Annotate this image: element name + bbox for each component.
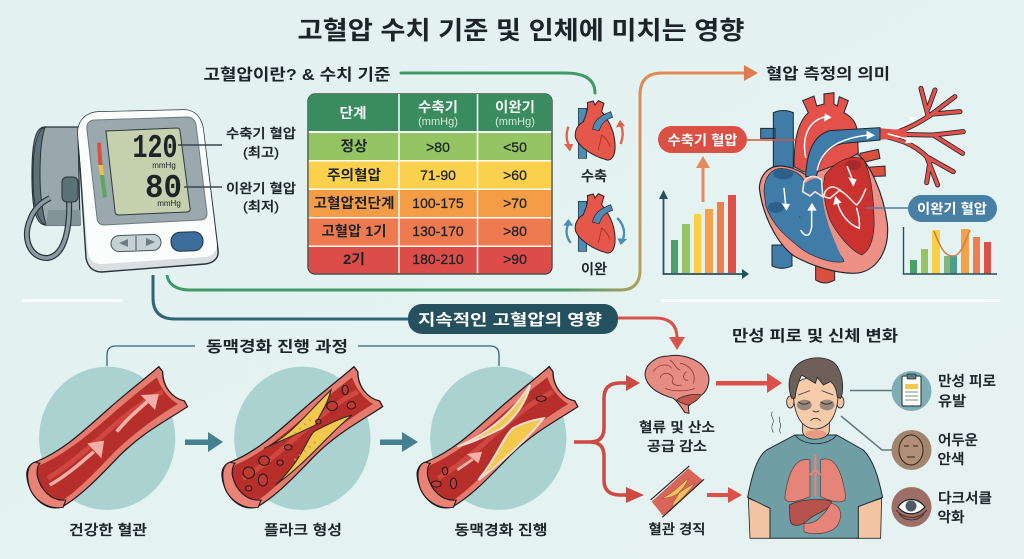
table rows: 고혈압전단계: [314, 195, 394, 211]
table rows: >80: [426, 139, 450, 155]
label: contraction: 수축: [581, 168, 607, 184]
table rows: 주의혈압: [327, 167, 381, 183]
icon: brain: [645, 355, 709, 413]
label: systolic: [226, 126, 296, 160]
lungs: [785, 459, 846, 502]
hair: [789, 358, 843, 398]
heart diagram: [759, 88, 963, 283]
table rows: [314, 138, 527, 267]
monitor body: [78, 110, 218, 272]
table rows: 고혈압 1기: [322, 223, 386, 239]
chart: systolic bars: [659, 190, 749, 279]
unit: mmHg: [157, 199, 181, 208]
fatigue lines: [771, 412, 781, 433]
table rows: 정상: [340, 138, 368, 154]
table rows: 71-90: [420, 167, 456, 183]
cuff: [32, 127, 80, 225]
symptom: worsened dark circles: 악화: [938, 509, 965, 525]
table rows: >60: [503, 167, 527, 183]
flow arrows: [784, 117, 912, 235]
symptom: dark complexion: 안색: [938, 451, 964, 467]
callout: systolic pressure: 수축기 혈압: [668, 132, 738, 148]
heading: arteriosclerosis process: 동맥경화 진행 과정: [206, 338, 348, 356]
arterial tree: [879, 88, 963, 185]
screen bezel: [87, 117, 207, 225]
label: progression: 동맥경화 진행: [454, 522, 548, 538]
aorta: [794, 93, 858, 173]
connector: monitor to meaning of measurement: [167, 65, 758, 290]
icon: eye: [892, 487, 932, 527]
label: diastolic: [226, 181, 296, 214]
table rows: 100-175: [412, 195, 464, 211]
connector: heading to heart cycle: [401, 73, 595, 93]
title: 고혈압 수치 기준 및 인체에 미치는 영향: [298, 17, 744, 45]
label: reduced blood flow: 공급 감소: [647, 439, 707, 454]
stage: healthy vessel: [27, 367, 188, 510]
label: reduced blood flow: 혈류 및 산소: [639, 419, 715, 435]
table header: 수축기: [418, 99, 458, 115]
heading: chronic fatigue and body changes: 만성 피로 및 신체 변화: [732, 327, 898, 345]
table rows: >80: [503, 223, 527, 239]
torso: [748, 435, 883, 538]
table: blood pressure stages: [308, 94, 552, 274]
icon: dark face: [892, 430, 932, 470]
table header: 단계: [340, 105, 366, 121]
table rows: 130-170: [412, 223, 464, 239]
table rows: <50: [503, 139, 527, 155]
table rows: >70: [503, 195, 527, 211]
branching arrows: [574, 375, 644, 503]
label: vessel stiffness: 혈관 경직: [648, 521, 706, 537]
label: systolic: (최고): [243, 145, 279, 160]
bracket: [107, 346, 499, 366]
chart: diastolic bars: [904, 227, 997, 274]
table header: [340, 99, 535, 128]
icon: heart contraction: [564, 101, 625, 160]
face: [793, 377, 838, 429]
badge: sustained hypertension effects: 지속적인 고혈압의 영향: [418, 311, 602, 329]
label: relaxation: 이완: [581, 261, 607, 277]
heading: meaning of measurement: 혈압 측정의 의미: [766, 65, 890, 83]
arrow: vessel to person: [707, 487, 742, 503]
table rows: >90: [503, 251, 527, 267]
badge: sustained hypertension effects: [408, 304, 685, 350]
arrow: stage 2 to 3: [380, 432, 418, 452]
neck: [803, 417, 829, 439]
buttons: [111, 234, 161, 252]
arrow: brain to person: [716, 373, 782, 393]
ears: [787, 396, 794, 408]
leader lines: [178, 145, 222, 187]
pulmonary veins right: [860, 149, 885, 177]
callout: diastolic pressure: 이완기 혈압: [917, 200, 988, 216]
arrow: stage 1 to 2: [185, 432, 223, 452]
icon: heart relaxation: [563, 194, 627, 253]
symptom: chronic fatigue: 만성 피로: [938, 373, 996, 389]
status colour bar: [97, 142, 107, 198]
label: systolic: 수축기 혈압: [226, 126, 296, 141]
callout: diastolic pressure: [865, 195, 997, 222]
symptom: dark complexion: 어두운: [938, 432, 978, 448]
dark circles: [797, 400, 812, 410]
table header: 이완기: [495, 99, 535, 115]
table header: (mmHg): [418, 116, 458, 128]
left chamber: [824, 157, 874, 255]
arrow: up to systolic: [696, 156, 710, 202]
label: plaque: 플라크 형성: [264, 522, 342, 538]
reading: 120: 120: [132, 130, 178, 167]
symptom: dark complexion: [892, 430, 978, 470]
icon: clipboard: [892, 371, 932, 411]
LCD: [106, 128, 190, 215]
table header: (mmHg): [495, 116, 535, 128]
illustration: tired person: [748, 358, 883, 538]
label: diastolic: (최저): [243, 199, 279, 214]
arms: [748, 498, 882, 538]
icon: blood pressure monitor: [27, 110, 222, 272]
stage: plaque formation: [222, 367, 383, 510]
symptom: worsened dark circles: 다크서클: [938, 490, 992, 506]
closed eyes and brows: [798, 402, 833, 404]
symptom: chronic fatigue: [892, 371, 996, 411]
connector: monitor to sustained effects: [153, 275, 412, 319]
outer body: [759, 152, 888, 273]
symptom: worsened dark circles: [892, 487, 992, 527]
heading: what is hypertension: 고혈압이란? & 수치 기준: [204, 65, 391, 84]
symptom: chronic fatigue: 유발: [938, 393, 966, 409]
right atrium and ventricle: [764, 168, 844, 262]
tube: [27, 198, 69, 258]
reading: 80: 80: [145, 170, 182, 207]
leader lines: [841, 390, 893, 450]
unit: mmHg: [152, 161, 176, 170]
callout: systolic pressure: [658, 126, 795, 153]
valves: [803, 176, 866, 205]
icon: stiffened vessel: [651, 466, 704, 517]
table rows: 2기: [343, 251, 365, 267]
vena cava: [761, 110, 793, 173]
table rows: 180-210: [412, 251, 464, 267]
pulmonary artery: [806, 128, 880, 177]
liver and stomach: [789, 499, 832, 525]
bottom stub: [816, 263, 835, 283]
stage: arteriosclerosis progression: [417, 367, 578, 510]
label: diastolic: 이완기 혈압: [226, 181, 296, 196]
label: healthy vessel: 건강한 혈관: [69, 522, 147, 538]
label: reduced blood flow: [639, 419, 715, 454]
